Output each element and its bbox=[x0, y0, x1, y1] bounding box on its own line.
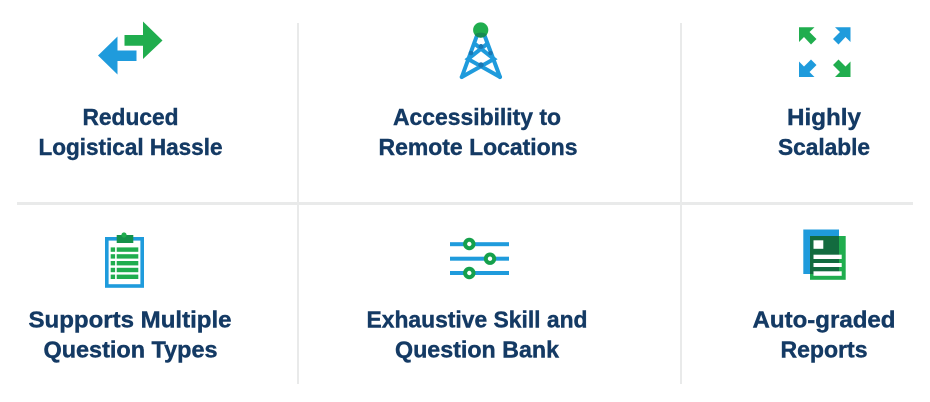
heading: Question Bank bbox=[395, 336, 559, 362]
heading bbox=[378, 104, 578, 160]
panel: accessibility to remote locations bbox=[378, 22, 578, 160]
heading: Accessibility to bbox=[393, 104, 561, 130]
heading: Scalable bbox=[778, 134, 870, 160]
heading: Reduced bbox=[82, 104, 178, 130]
heading bbox=[778, 104, 870, 160]
panel: supports multiple question types bbox=[28, 232, 232, 362]
heading bbox=[752, 306, 896, 362]
panel: auto-graded reports bbox=[752, 230, 896, 362]
heading bbox=[28, 306, 232, 362]
heading: Exhaustive Skill and bbox=[366, 306, 588, 332]
icon: exchange arrows bbox=[98, 22, 162, 74]
heading: Logistical Hassle bbox=[38, 134, 222, 160]
heading: Highly bbox=[787, 104, 861, 130]
icon: report document bbox=[803, 230, 846, 280]
heading bbox=[38, 104, 222, 160]
icon: clipboard bbox=[107, 232, 142, 286]
heading: Question Types bbox=[44, 336, 218, 362]
panel: exhaustive skill and question bank bbox=[366, 240, 588, 362]
heading: Remote Locations bbox=[378, 134, 578, 160]
panel: highly scalable bbox=[778, 27, 870, 160]
heading: Supports Multiple bbox=[28, 306, 232, 332]
heading: Reports bbox=[780, 336, 868, 362]
icon: radio tower bbox=[462, 22, 500, 77]
icon: sliders bbox=[450, 240, 509, 277]
heading bbox=[366, 306, 588, 362]
heading: Auto-graded bbox=[752, 306, 896, 332]
panel: reduced logistical hassle bbox=[38, 22, 222, 160]
icon: expand arrows bbox=[799, 27, 850, 77]
